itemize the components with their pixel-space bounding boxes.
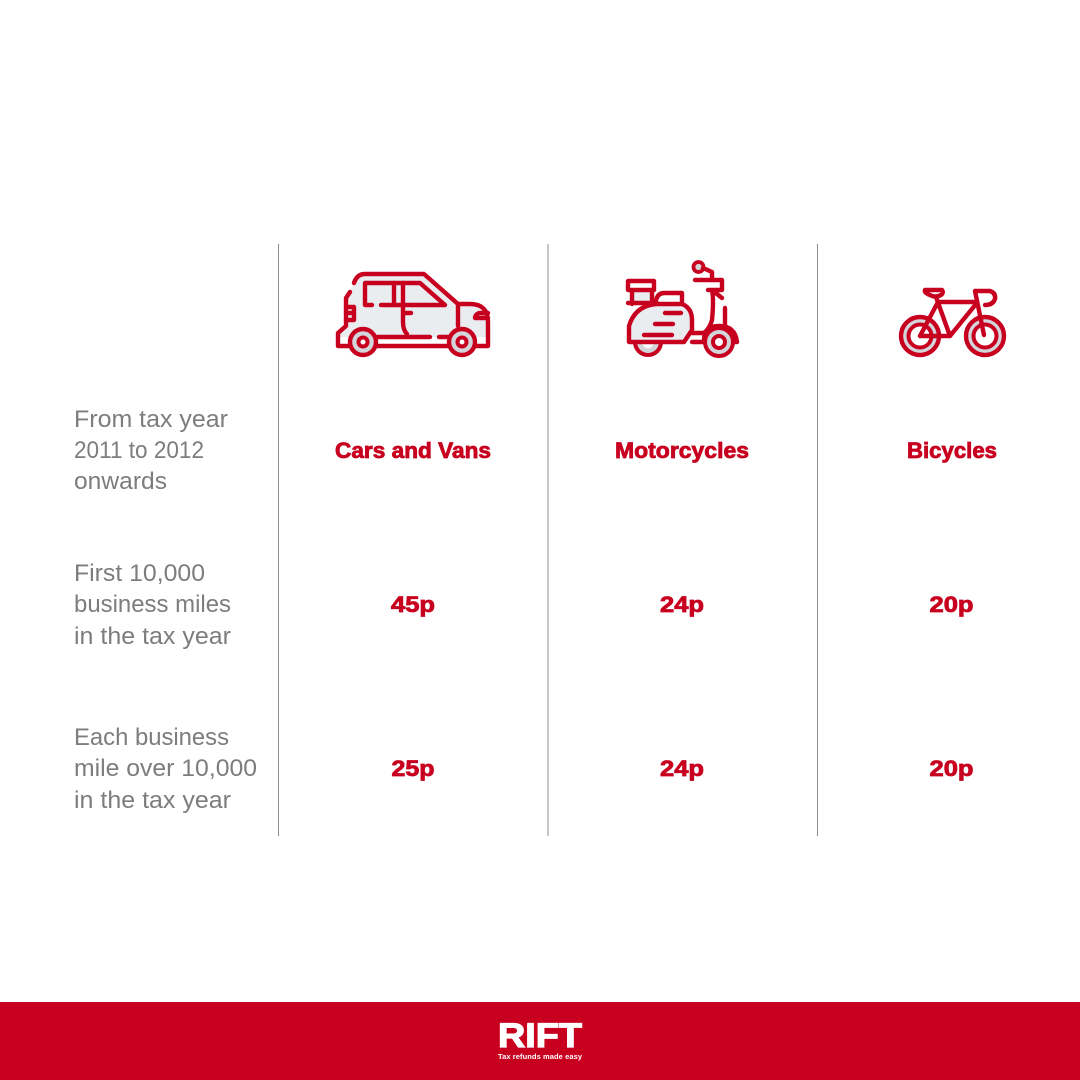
row label: first 10,000 miles: in the tax year (74, 623, 231, 650)
footer band (0, 1002, 1080, 1080)
row label: first 10,000 miles: business miles (74, 591, 231, 618)
row label: from tax year: 2011 to 2012 (74, 437, 204, 464)
icon: bicycle (901, 290, 1004, 355)
value: motorcycles first 10,000: 24p (660, 592, 704, 617)
row label: over 10,000 miles: mile over 10,000 (74, 755, 257, 782)
row label: from tax year: From tax year (74, 406, 228, 433)
row label: first 10,000 miles: First 10,000 (74, 560, 205, 587)
column heading: motorcycles: Motorcycles (615, 438, 749, 463)
logo: RIFT: RIFT (498, 1017, 582, 1055)
value: bicycles over 10,000: 20p (930, 756, 974, 781)
row label: from tax year: onwards (74, 468, 167, 495)
row label: over 10,000 miles: Each business (74, 724, 229, 751)
icon: motorcycle (628, 262, 737, 356)
column heading: bicycles: Bicycles (907, 438, 997, 463)
column heading: cars and vans: Cars and Vans (335, 438, 491, 463)
value: motorcycles over 10,000: 24p (660, 756, 704, 781)
value: cars first 10,000: 45p (391, 592, 435, 617)
value: bicycles first 10,000: 20p (930, 592, 974, 617)
row label: over 10,000 miles: in the tax year (74, 787, 231, 814)
icon: car (338, 274, 488, 355)
logo: RIFT: Tax refunds made easy (498, 1052, 583, 1061)
value: cars over 10,000: 25p (392, 756, 434, 781)
